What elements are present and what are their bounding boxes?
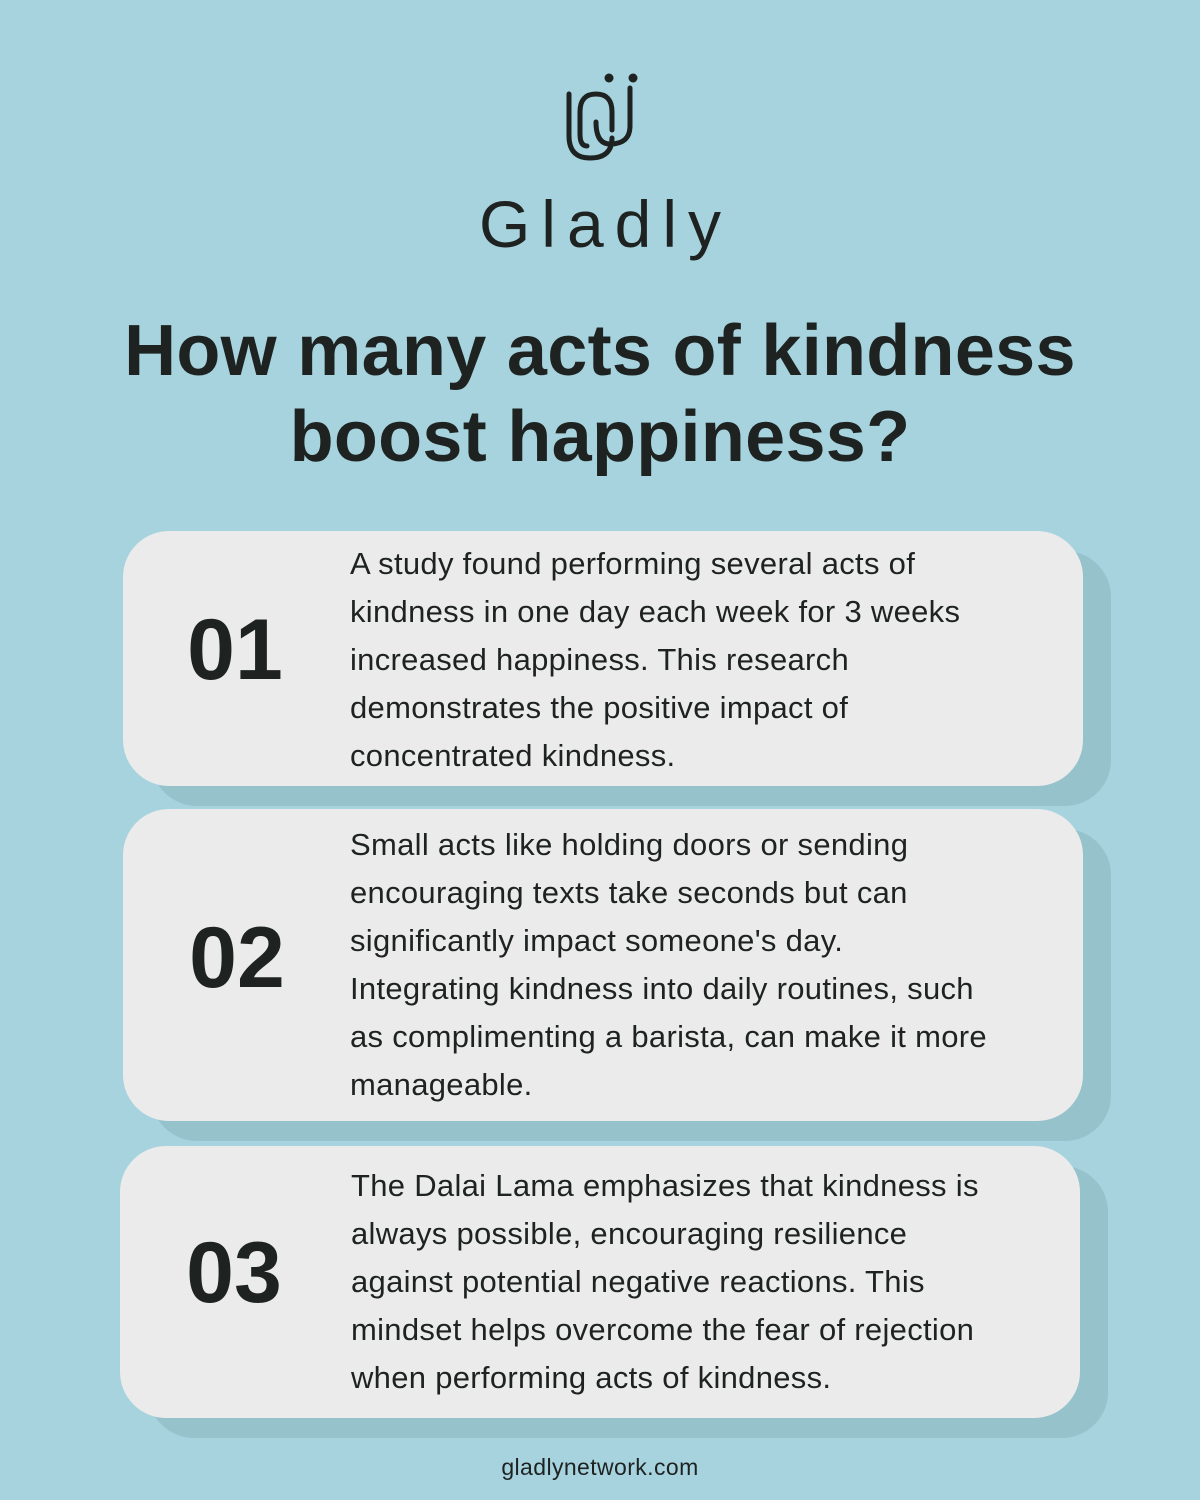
text 02: encouraging texts take seconds but can — [350, 875, 908, 910]
title — [124, 311, 1076, 477]
text 01: demonstrates the positive impact of — [350, 690, 848, 725]
text 01: increased happiness. This research — [350, 642, 849, 677]
text 03: mindset helps overcome the fear of rejection — [351, 1312, 974, 1347]
title: boost happiness? — [290, 397, 910, 477]
text 02: significantly impact someone's day. — [350, 923, 843, 958]
text 02: manageable. — [350, 1067, 533, 1102]
text 02: Small acts like holding doors or sending — [350, 827, 908, 862]
text 01: kindness in one day each week for 3 weeks — [350, 594, 960, 629]
panel: point 02 — [123, 809, 1111, 1141]
panel: point 01 — [123, 531, 1111, 806]
text 01: A study found performing several acts of — [350, 546, 915, 581]
text 03 — [351, 1168, 979, 1395]
number 01: 01 — [187, 602, 283, 698]
text 01: concentrated kindness. — [350, 738, 675, 773]
text 03: The Dalai Lama emphasizes that kindness is — [351, 1168, 979, 1203]
number 02: 02 — [189, 910, 285, 1006]
text 01 — [350, 546, 960, 773]
text 03: when performing acts of kindness. — [351, 1360, 831, 1395]
footer url: gladlynetwork.com — [501, 1454, 699, 1480]
text 03: always possible, encouraging resilience — [351, 1216, 907, 1251]
text 03: against potential negative reactions. This — [351, 1264, 925, 1299]
logo icon — [566, 74, 638, 160]
panel: point 03 — [120, 1146, 1108, 1438]
text 02: as complimenting a barista, can make it more — [350, 1019, 987, 1054]
text 02: Integrating kindness into daily routines, such — [350, 971, 974, 1006]
title: How many acts of kindness — [124, 311, 1076, 391]
number 03: 03 — [186, 1225, 282, 1321]
brand name: Gladly — [479, 187, 732, 261]
text 02 — [350, 827, 987, 1102]
